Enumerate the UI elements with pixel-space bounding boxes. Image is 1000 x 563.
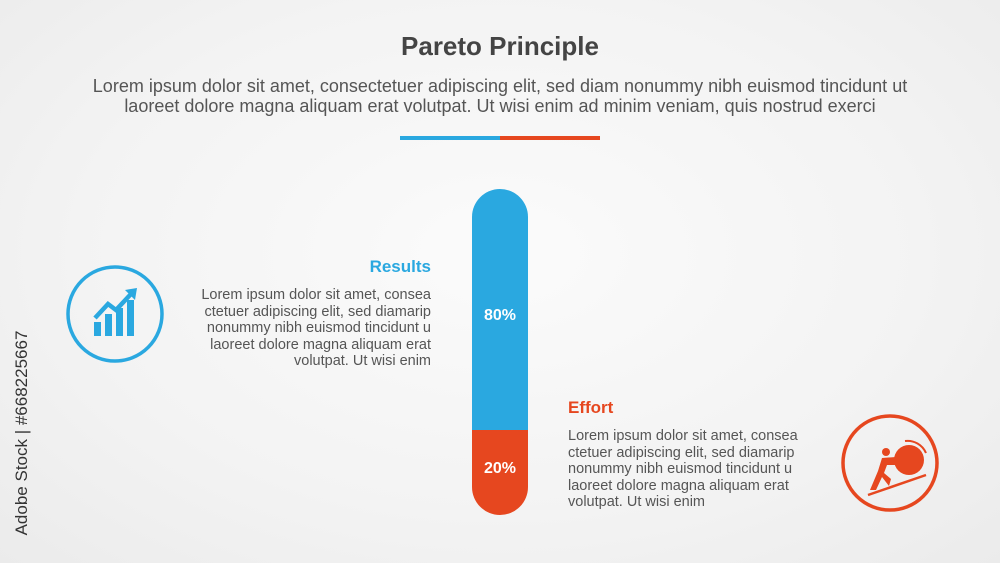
watermark text: Adobe Stock | #668225667 — [12, 331, 31, 535]
text: effort — [568, 428, 798, 510]
text: effort: ctetuer adipiscing elit, sed diamarip — [568, 445, 794, 461]
segment: 20%: 20% — [484, 460, 516, 477]
segment: 80% — [472, 189, 528, 430]
text: results: Lorem ipsum dolor sit amet, consea — [201, 287, 431, 303]
icon: pushing boulder — [841, 414, 939, 512]
text: results: ctetuer adipiscing elit, sed diamarip — [205, 304, 431, 320]
text: results: nonummy nibh euismod tincidunt u — [207, 320, 431, 336]
segment: 80%: 80% — [484, 307, 516, 324]
text: effort: nonummy nibh euismod tincidunt u — [568, 461, 792, 477]
subtitle — [93, 76, 908, 116]
bar chart: 80/20 capsule — [472, 189, 528, 515]
text: effort: volutpat. Ut wisi enim — [568, 494, 705, 510]
text: results: volutpat. Ut wisi enim — [294, 353, 431, 369]
icon: growth chart — [66, 265, 164, 363]
subtitle: Lorem ipsum dolor sit amet, consectetuer adipiscing elit, sed diam nonummy nibh euismod tincidunt ut — [93, 76, 907, 96]
heading: results: Results — [370, 257, 431, 276]
text: results: laoreet dolore magna aliquam erat — [210, 337, 431, 353]
title: Pareto Principle — [401, 31, 599, 61]
segment: 20% — [472, 430, 528, 515]
text: results — [201, 287, 431, 369]
divider — [400, 136, 600, 140]
text: effort: laoreet dolore magna aliquam erat — [568, 478, 789, 494]
subtitle: laoreet dolore magna aliquam erat volutpat. Ut wisi enim ad minim veniam, quis nostrud exerci — [124, 96, 876, 116]
text: effort: Lorem ipsum dolor sit amet, consea — [568, 428, 798, 444]
heading: effort: Effort — [568, 398, 613, 417]
